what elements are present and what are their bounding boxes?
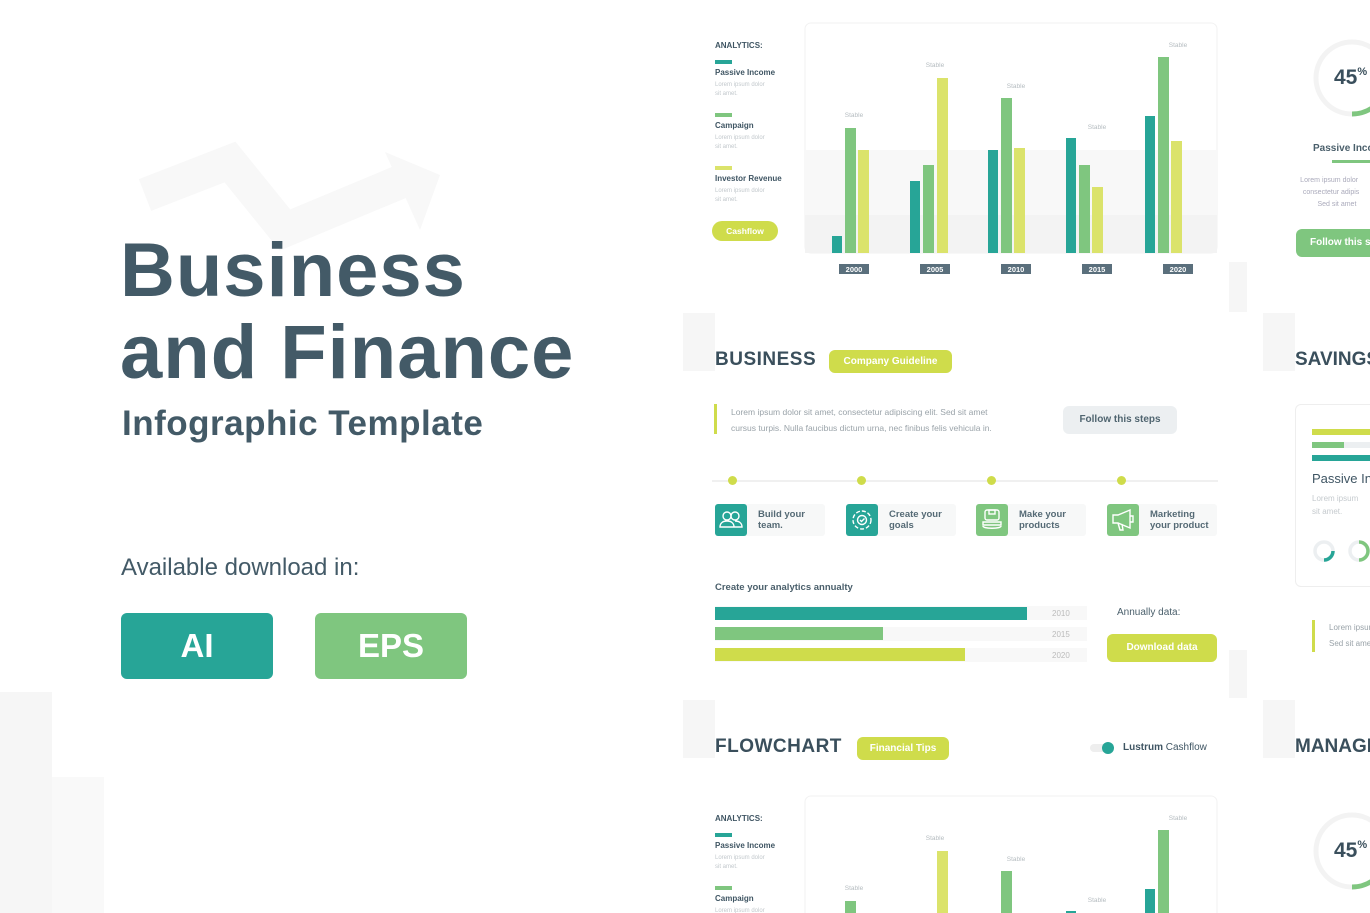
card: savings: sit amet. [1312, 507, 1342, 516]
text block: savings note [1312, 620, 1370, 652]
legend: sit amet. [715, 91, 738, 97]
text block: business description [714, 404, 1044, 434]
tag: company guideline [829, 350, 952, 373]
panel: analytics chart bottom: Passive Income [715, 841, 775, 850]
card: savings [1295, 404, 1370, 587]
panel: analytics chart bottom: Stable [845, 885, 864, 892]
bar chart: Stable [1088, 124, 1107, 131]
donut: 45% top [1314, 40, 1370, 116]
button: follow this steps: Follow this steps [1079, 414, 1161, 425]
step: create your goals: goals [889, 520, 914, 531]
step: create your goals: Create your [889, 509, 942, 520]
button: AI: AI [180, 627, 214, 664]
button: download data [1107, 634, 1217, 662]
subtitle: Infographic Template [122, 404, 483, 443]
toggle: lustrum cashflow [1090, 742, 1207, 754]
tag: company guideline: Company Guideline [844, 356, 937, 367]
legend: Lorem ipsum dolor [715, 82, 765, 88]
step: marketing your product [1107, 504, 1217, 536]
text block: business description: cursus turpis. Nulla faucibus dictum urna, nec finibus felis vehicula in. [731, 423, 992, 433]
bar chart: Stable [1007, 83, 1026, 90]
panel: analytics chart bottom: Campaign [715, 894, 754, 903]
legend: Passive Income [715, 68, 775, 77]
panel: analytics chart bottom: sit amet. [715, 864, 738, 870]
panel: analytics chart top [712, 22, 1218, 274]
donut: 45% bottom [1314, 812, 1370, 890]
panel: right column partial: consectetur adipis [1303, 189, 1359, 196]
bar chart: Stable [845, 112, 864, 119]
panel: analytics chart bottom [715, 796, 1218, 913]
button: AI [121, 613, 273, 679]
tag: financial tips [857, 737, 949, 760]
step: marketing your product: your product [1150, 520, 1209, 531]
step: build your team: team. [758, 520, 783, 531]
legend: Campaign [715, 121, 754, 130]
bar chart: annual horizontal: 2020 [1052, 651, 1070, 660]
legend [715, 41, 782, 203]
bar chart: 2005 [927, 265, 943, 274]
title [120, 228, 574, 395]
bar chart: annual horizontal: 2010 [1052, 609, 1070, 618]
legend: Lorem ipsum dolor [715, 188, 765, 194]
bar chart: annual horizontal: 2015 [1052, 630, 1070, 639]
bar chart: 2015 [1089, 265, 1105, 274]
download label: Available download in: [121, 554, 359, 581]
legend: Lorem ipsum dolor [715, 135, 765, 141]
text block: business description: Lorem ipsum dolor sit amet, consectetur adipiscing elit. Sed sit amet [731, 407, 988, 417]
bar chart: Stable [926, 62, 945, 69]
step: build your team: Build your [758, 509, 805, 520]
bar chart [804, 22, 1218, 274]
panel: right column partial: Sed sit amet [1317, 201, 1356, 208]
tag: financial tips: Financial Tips [870, 743, 936, 754]
label: annually data: Annually data: [1117, 607, 1180, 618]
panel: analytics chart bottom: Stable [1169, 815, 1188, 822]
panel: right column partial: Lorem ipsum dolor [1300, 177, 1358, 184]
icon: background arrow [120, 130, 460, 260]
panel: analytics chart bottom: Stable [1088, 897, 1107, 904]
step: make your products [976, 504, 1086, 536]
button: follow this steps [1063, 406, 1177, 434]
panel: analytics chart bottom: ANALYTICS: [715, 814, 763, 823]
panel: right column partial [1295, 40, 1370, 890]
legend: sit amet. [715, 197, 738, 203]
panel: analytics chart bottom: Lorem ipsum dolor [715, 855, 765, 861]
timeline [712, 476, 1218, 485]
step: create your goals [846, 504, 956, 536]
button: cashflow [712, 221, 778, 241]
heading: flowchart: FLOWCHART [715, 736, 842, 757]
bar chart: 2010 [1008, 265, 1024, 274]
toggle: lustrum cashflow: Lustrum Cashflow [1123, 742, 1207, 753]
panel: analytics chart bottom: Stable [1007, 856, 1026, 863]
title: and Finance [120, 310, 574, 395]
heading: analytics annually: Create your analytics annualty [715, 582, 853, 593]
bar chart: 2000 [846, 265, 862, 274]
button: download data: Download data [1126, 642, 1198, 653]
bar chart: annual horizontal [715, 607, 1070, 661]
step: build your team [715, 504, 825, 536]
background decorative blocks [0, 692, 52, 913]
panel: right column partial: 45% [1334, 66, 1367, 89]
legend: Investor Revenue [715, 174, 782, 183]
bar chart: Stable [1169, 42, 1188, 49]
panel: right column partial: 45% [1334, 839, 1367, 862]
button: EPS: EPS [358, 627, 424, 664]
legend: sit amet. [715, 144, 738, 150]
step: make your products: products [1019, 520, 1060, 531]
card: savings: Lorem ipsum [1312, 494, 1358, 503]
button: EPS [315, 613, 467, 679]
bar chart: 2020 [1170, 265, 1186, 274]
button: cashflow: Cashflow [726, 226, 764, 236]
title: Business [120, 228, 466, 313]
heading: business: BUSINESS [715, 349, 816, 370]
step: marketing your product: Marketing [1150, 509, 1195, 520]
legend: ANALYTICS: [715, 41, 763, 50]
panel: analytics chart bottom: Stable [926, 835, 945, 842]
step: make your products: Make your [1019, 509, 1066, 520]
